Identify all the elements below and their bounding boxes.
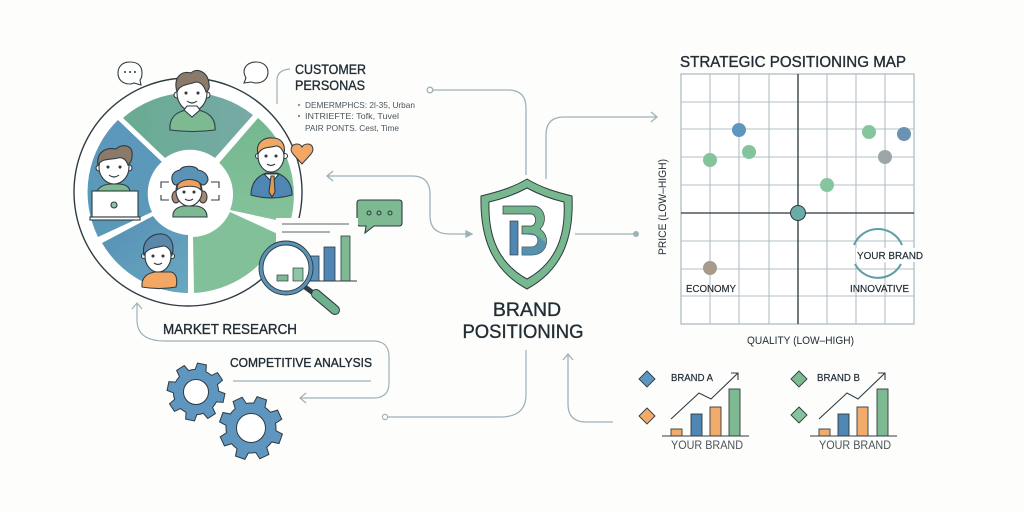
text block: persona attributes: DEMERMPHCS: 2l-35, Urban bbox=[305, 100, 415, 110]
heading: brand positioning bbox=[462, 299, 584, 343]
heading: customer personas bbox=[295, 61, 366, 93]
legend: brand A diamonds bbox=[639, 371, 655, 424]
icon: bottom persona bbox=[142, 234, 177, 288]
wedge: bottom left bbox=[102, 216, 188, 293]
text block: persona attributes bbox=[298, 100, 415, 133]
axis label: quality: QUALITY (LOW–HIGH) bbox=[747, 335, 854, 347]
heading: brand positioning: BRAND bbox=[493, 299, 561, 321]
chart: brand B bars bbox=[810, 373, 897, 436]
icon: small gear bbox=[162, 358, 230, 426]
icon: large gear bbox=[210, 387, 292, 469]
label: economy: ECONOMY bbox=[686, 283, 736, 295]
wedge: right bbox=[219, 118, 294, 223]
arrow: charts to brand bbox=[563, 354, 613, 422]
chart: brand A bars bbox=[662, 373, 749, 436]
label: your brand B: YOUR BRAND bbox=[819, 438, 891, 452]
label: brand A: BRAND A bbox=[671, 373, 713, 384]
icon: right persona bbox=[251, 138, 292, 198]
center hub persona bbox=[148, 151, 232, 235]
arrow: lower connector to brand bbox=[382, 350, 526, 420]
icon: left persona with laptop bbox=[90, 146, 140, 220]
arrow: top-left connector bbox=[427, 87, 526, 175]
heading: customer personas: CUSTOMER bbox=[295, 61, 366, 77]
connector: persona bracket bbox=[277, 69, 290, 104]
label: brand B: BRAND B bbox=[817, 373, 860, 384]
icon: chat bubble green bbox=[357, 200, 402, 233]
label: your brand: YOUR BRAND bbox=[857, 250, 923, 262]
heading: competitive analysis: COMPETITIVE ANALYSIS bbox=[230, 356, 372, 370]
icon: top persona bbox=[170, 70, 215, 132]
outer ring bbox=[74, 78, 302, 306]
text block: persona attributes: INTRIEFTE: Tofk, Tuvel bbox=[305, 111, 399, 121]
axis label: price: PRICE (LOW–HIGH) bbox=[657, 159, 669, 255]
icon: heart bbox=[291, 144, 313, 164]
heading: brand positioning: POSITIONING bbox=[462, 321, 584, 343]
heading: market research: MARKET RESEARCH bbox=[163, 322, 297, 338]
heading: strategic positioning map: STRATEGIC POSITIONING MAP bbox=[680, 54, 906, 71]
arrow: persona to brand bbox=[327, 171, 472, 237]
label: innovative: INNOVATIVE bbox=[850, 283, 909, 295]
wedge: top bbox=[123, 93, 253, 158]
icon: speech bubble with dots bbox=[118, 62, 142, 85]
icon: magnifier over bar chart bbox=[259, 218, 358, 310]
wedge: bottom right bbox=[193, 212, 280, 293]
wedge: left bbox=[88, 120, 162, 237]
text block: persona attributes: PAIR PONTS. Cest, Time bbox=[305, 123, 399, 133]
your brand marker bbox=[854, 229, 902, 278]
arrow: market research loop bbox=[132, 303, 389, 403]
icon: brand shield bbox=[481, 179, 572, 289]
panel: customer persona wheel bbox=[74, 70, 302, 306]
arrow: to positioning map bbox=[546, 112, 657, 179]
legend: brand B diamonds bbox=[791, 371, 807, 423]
icon: empty speech bubble bbox=[244, 62, 268, 83]
divider under competitive analysis bbox=[233, 380, 371, 382]
arrow: brand to map dot bbox=[575, 231, 639, 237]
chart: positioning map bbox=[681, 74, 924, 324]
data points bbox=[703, 123, 911, 275]
heading: customer personas: PERSONAS bbox=[295, 77, 365, 93]
label: your brand A: YOUR BRAND bbox=[671, 438, 743, 452]
